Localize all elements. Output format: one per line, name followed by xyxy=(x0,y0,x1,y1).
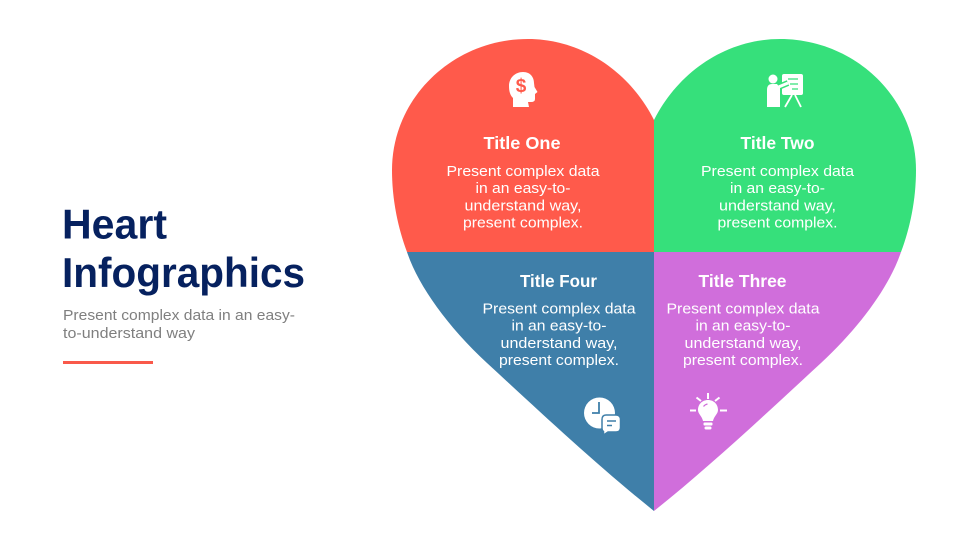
title two body xyxy=(701,163,855,232)
heading xyxy=(62,200,305,296)
title four heading: Title Four xyxy=(520,271,597,291)
title two body: in an easy-to- xyxy=(730,180,825,197)
title two body: present complex. xyxy=(718,214,838,232)
panel: title four (blue, bottom left) xyxy=(407,252,654,511)
heading: Infographics xyxy=(62,249,305,296)
title three body: understand way, xyxy=(684,335,802,352)
title four body: present complex. xyxy=(499,352,619,369)
icon: head with dollar sign: $ xyxy=(516,76,527,97)
title four body: Present complex data xyxy=(482,300,636,318)
title one body: Present complex data xyxy=(446,163,600,180)
icon: presenter at board xyxy=(767,74,803,107)
icon: clock with speech bubble xyxy=(584,398,620,435)
title four body xyxy=(482,300,636,369)
subtitle text: to-understand way xyxy=(63,325,196,342)
title three body: present complex. xyxy=(683,352,803,369)
title two body: Present complex data xyxy=(701,163,855,180)
title three body: in an easy-to- xyxy=(696,318,790,334)
title one body xyxy=(446,163,600,232)
icon: light bulb xyxy=(690,393,727,430)
title three heading: Title Three xyxy=(698,271,787,291)
title two heading: Title Two xyxy=(740,133,814,153)
title three body xyxy=(666,300,820,369)
title four body: in an easy-to- xyxy=(512,318,606,334)
title one heading: Title One xyxy=(484,133,561,153)
title two body: understand way, xyxy=(719,198,836,214)
title one body: understand way, xyxy=(464,198,582,214)
subtitle text: Present complex data in an easy- xyxy=(63,307,295,324)
accent line xyxy=(63,361,153,364)
icon: head with dollar sign xyxy=(509,72,538,107)
title four body: understand way, xyxy=(500,335,618,352)
title one body: present complex. xyxy=(463,214,583,232)
title three body: Present complex data xyxy=(666,300,820,318)
panel: title two (green, top right) xyxy=(654,39,916,252)
panel: title one (red, top left) xyxy=(392,39,654,252)
subtitle text xyxy=(63,307,295,342)
panel: title three (purple, bottom right) xyxy=(654,252,901,511)
heading: Heart xyxy=(62,200,167,248)
title one body: in an easy-to- xyxy=(476,180,570,197)
